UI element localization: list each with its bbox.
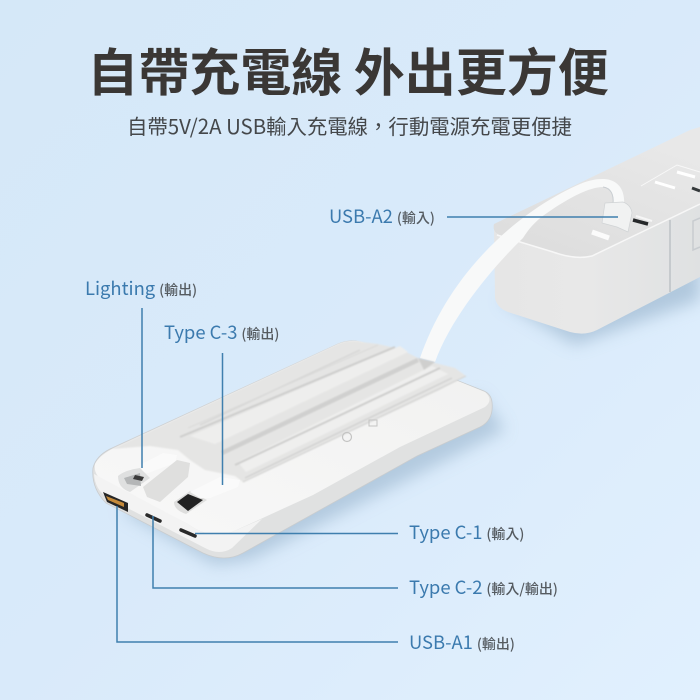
label: USB-A1 bbox=[117, 506, 515, 655]
power bank bbox=[93, 341, 505, 565]
label: Type C-2: Type C-2 (輸入/輸出) bbox=[409, 574, 558, 600]
power strip bbox=[494, 127, 700, 345]
USB-A1 port bbox=[103, 492, 128, 512]
label: Type C-2 bbox=[153, 516, 558, 600]
front face bbox=[94, 474, 262, 552]
charging cable bbox=[420, 179, 624, 362]
USB plug bbox=[602, 202, 632, 232]
subtitle: 自帶5V/2A USB輸入充電線，行動電源充電更便捷 bbox=[127, 110, 572, 140]
centre recess bbox=[143, 460, 190, 502]
Type C-1 port bbox=[181, 530, 195, 536]
Type C-3 connector and cap bbox=[174, 477, 240, 514]
top surface bbox=[95, 341, 489, 535]
body base bbox=[93, 341, 492, 558]
label: Type C-1: Type C-1 (輸入) bbox=[409, 519, 524, 545]
title: 自帶充電線 外出更方便 bbox=[87, 32, 609, 106]
label: USB-A1: USB-A1 (輸出) bbox=[409, 629, 515, 655]
label: Lighting: Lighting (輸出) bbox=[85, 275, 197, 301]
cable channels bbox=[112, 341, 466, 482]
label: USB-A2: USB-A2 (輸入) bbox=[329, 203, 435, 229]
label: Type C-3: Type C-3 (輸出) bbox=[164, 319, 279, 345]
indicator icon bbox=[369, 420, 377, 426]
Lighting recess and connector bbox=[118, 453, 177, 492]
power button icon bbox=[342, 432, 352, 442]
strip sockets bbox=[592, 165, 700, 250]
Type C-2 port bbox=[147, 515, 160, 521]
